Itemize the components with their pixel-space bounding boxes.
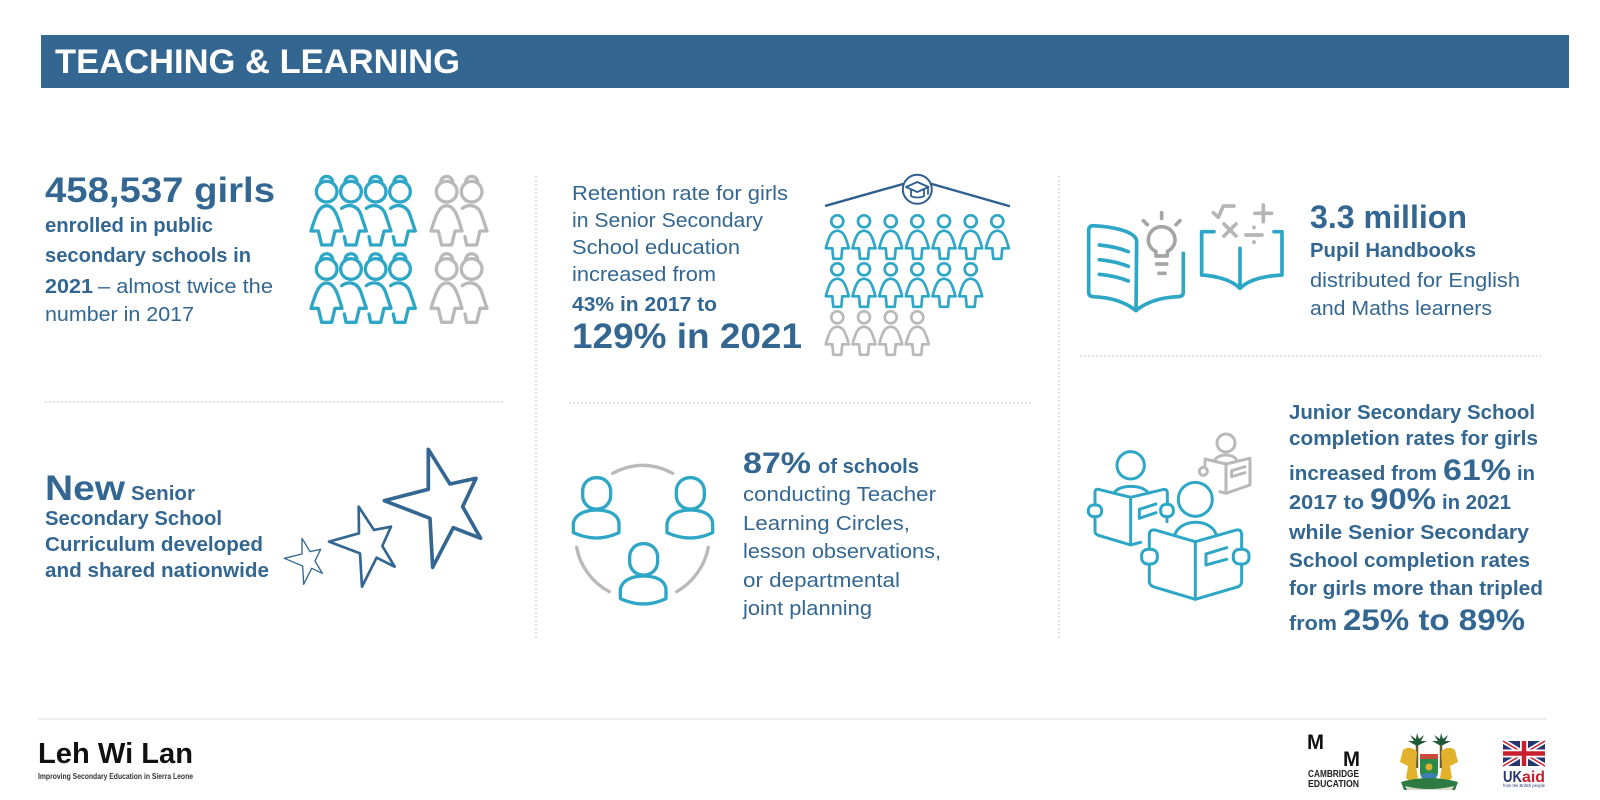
panel: new curriculum text: New [45, 469, 126, 508]
panel: completion rates text: for girls more than tripled [1289, 578, 1543, 600]
panel: new curriculum text: Secondary School [45, 508, 222, 530]
panel: teacher learning circles text [742, 447, 941, 620]
title banner [41, 35, 1569, 88]
panel: completion rates text: Junior Secondary School [1289, 402, 1535, 424]
icon: open books with bulb and maths symbols [1089, 205, 1282, 311]
logo: UK aid: aid [1522, 769, 1545, 786]
panel: girls enrolled text: – almost twice the [98, 276, 273, 298]
logo: Cambridge Education [1307, 731, 1360, 790]
panel: teacher learning circles text: of schools [818, 456, 919, 478]
panel: girls enrolled text: 2021 [45, 276, 93, 298]
panel: teacher learning circles text: joint planning [742, 598, 872, 620]
panel: pupil handbooks text: and Maths learners [1310, 298, 1492, 320]
icon: three stars [284, 449, 481, 587]
panel: new curriculum text: Curriculum developed [45, 534, 263, 556]
panel: retention rate text: in Senior Secondary [572, 210, 763, 232]
panel: completion rates text: School completion rates [1289, 550, 1530, 572]
panel: girls enrolled text: secondary schools in [45, 245, 251, 267]
panel: teacher learning circles text: Learning Circles, [743, 513, 910, 535]
panel: pupil handbooks text: distributed for English [1310, 270, 1520, 292]
panel: girls enrolled text: 458,537 girls [45, 171, 275, 210]
panel: girls enrolled text: number in 2017 [45, 304, 194, 326]
panel: teacher learning circles text: or departmental [743, 570, 900, 592]
logo: Sierra Leone coat of arms [1400, 733, 1458, 790]
logo: UK aid [1503, 741, 1545, 788]
panel: retention rate text: Retention rate for girls [572, 183, 788, 205]
panel: girls enrolled text: enrolled in public [45, 215, 213, 237]
panel: completion rates text: 25% to 89% [1343, 604, 1525, 637]
panel: completion rates text: 90% [1370, 483, 1436, 516]
panel: girls enrolled text [45, 171, 275, 326]
logo: Leh Wi Lan: Leh Wi Lan [38, 738, 193, 770]
panel: completion rates text: 2017 to [1289, 492, 1364, 514]
panel: retention rate text: 129% in 2021 [572, 317, 802, 356]
panel: teacher learning circles text: lesson observations, [743, 541, 941, 563]
logo: Cambridge Education: CAMBRIDGE [1308, 769, 1359, 780]
panel: completion rates text: in 2021 [1442, 492, 1511, 514]
panel: new curriculum text [45, 469, 269, 582]
panel: pupil handbooks text: Pupil Handbooks [1310, 240, 1476, 262]
panel: pupil handbooks text [1310, 199, 1520, 320]
panel: teacher learning circles text: conducting Teacher [743, 484, 936, 506]
icon: pupils pictogram [826, 215, 1009, 355]
panel: retention rate text: increased from [572, 264, 716, 286]
logo: UK aid: UK [1503, 769, 1522, 786]
panel: completion rates text: completion rates for girls [1289, 428, 1538, 450]
icon: pupils reading [1088, 434, 1250, 599]
logo: UK aid: from the British people [1503, 783, 1545, 788]
panel: completion rates text: in [1517, 463, 1535, 485]
panel: completion rates text: 61% [1443, 454, 1511, 487]
panel: retention rate text [572, 183, 802, 356]
logo: Cambridge Education: M [1343, 748, 1360, 771]
logo: Cambridge Education: M [1307, 731, 1324, 754]
icon: teacher learning circle [573, 465, 713, 604]
icon: school roof with graduation cap [826, 175, 1009, 206]
title banner: TEACHING & LEARNING [55, 43, 460, 81]
panel: completion rates text: from [1289, 613, 1337, 635]
panel: new curriculum text: and shared nationwide [45, 560, 269, 582]
panel: new curriculum text: Senior [131, 483, 195, 505]
icon: girls pictogram [311, 176, 487, 322]
panel: completion rates text: increased from [1289, 463, 1437, 485]
panel: teacher learning circles text: 87% [743, 447, 811, 480]
logo: Cambridge Education: EDUCATION [1308, 779, 1359, 790]
panel: retention rate text: 43% in 2017 to [572, 294, 717, 316]
panel: retention rate text: School education [572, 237, 740, 259]
logo: Leh Wi Lan: Improving Secondary Education in Sierra Leone [38, 771, 193, 781]
panel: completion rates text [1288, 402, 1543, 637]
panel: completion rates text: while Senior Secondary [1288, 522, 1530, 544]
panel: pupil handbooks text: 3.3 million [1310, 199, 1467, 235]
